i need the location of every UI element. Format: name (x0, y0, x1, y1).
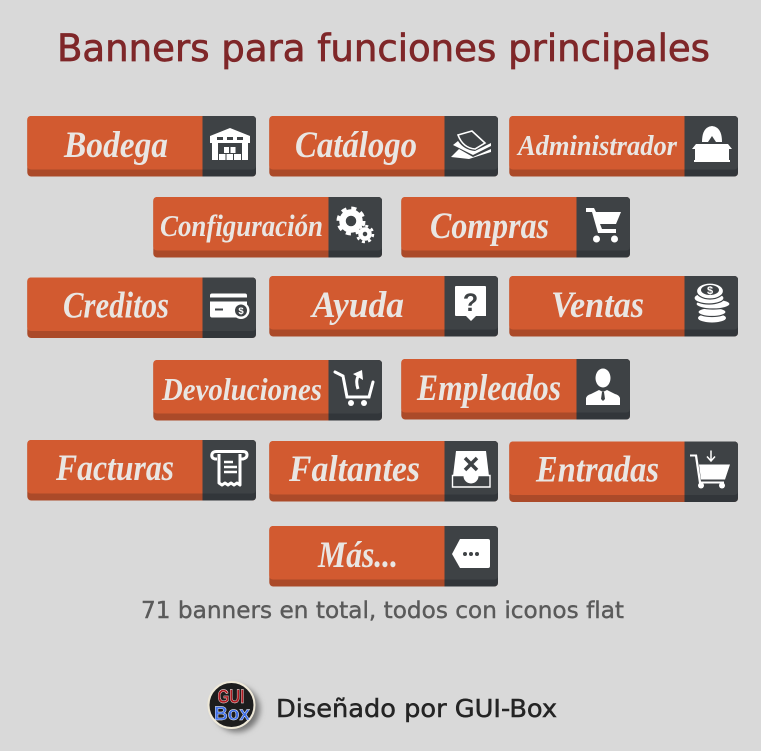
logo: GUI-Box: Box (214, 704, 250, 725)
banner: Compras: Compras (430, 206, 549, 247)
banner: Bodega (27, 116, 256, 176)
banner: Configuración (153, 197, 382, 258)
banner: Ayuda: Ayuda (310, 285, 404, 326)
credit line: Diseñado por GUI-Box (276, 694, 557, 723)
banner: Empleados (401, 359, 630, 420)
banner: Entradas: Entradas (535, 450, 659, 490)
banner: Creditos: Creditos (63, 286, 169, 326)
banner: Ventas (509, 276, 738, 336)
subtitle: 71 banners en total, todos con iconos flat (141, 598, 624, 624)
icon: receipt (212, 452, 247, 485)
title: Banners para funciones principales (57, 27, 710, 70)
banner: Entradas (509, 442, 738, 502)
icon: shopping cart (586, 208, 621, 242)
icon: coins: $ (707, 285, 713, 297)
icon: employee (586, 368, 620, 405)
banner: Facturas: Facturas (55, 448, 174, 489)
banner: Faltantes: Faltantes (288, 449, 420, 490)
icon: rejected inbox (452, 451, 490, 487)
icon: coins (694, 283, 730, 322)
banner: Administrador (509, 116, 738, 176)
banner: Bodega: Bodega (63, 125, 168, 166)
banner: Ventas: Ventas (551, 285, 644, 326)
icon: help bubble (455, 286, 486, 321)
banner: Más (269, 526, 498, 586)
icon: person at desk (692, 126, 732, 162)
icon: more tag (452, 539, 490, 568)
banner: Empleados: Empleados (416, 368, 561, 409)
banner: Faltantes (269, 441, 498, 502)
banner: Catálogo: Catálogo (295, 125, 417, 166)
banner: Catálogo (269, 116, 498, 176)
logo: GUI-Box (208, 682, 260, 732)
icon: cart with down arrow (690, 450, 730, 488)
icon: help bubble: ? (463, 289, 478, 317)
banner: Administrador: Administrador (516, 130, 678, 162)
icon: credit card with coin (210, 294, 250, 319)
banner: Devoluciones: Devoluciones (161, 371, 322, 407)
banner: Facturas (27, 440, 256, 500)
icon: paper stack (451, 131, 491, 159)
banner: Devoluciones (153, 360, 382, 420)
logo: GUI-Box: GUI (218, 687, 244, 708)
icon: warehouse (210, 128, 250, 160)
banner: Más: Más... (317, 535, 398, 576)
banner: Configuración: Configuración (160, 208, 323, 243)
icon: return cart (335, 370, 373, 406)
banner: Compras (401, 197, 630, 258)
banner: Creditos (27, 278, 256, 338)
banner: Ayuda (269, 276, 498, 336)
icon: gears (338, 208, 373, 242)
icon: credit card with coin: $ (238, 306, 244, 317)
